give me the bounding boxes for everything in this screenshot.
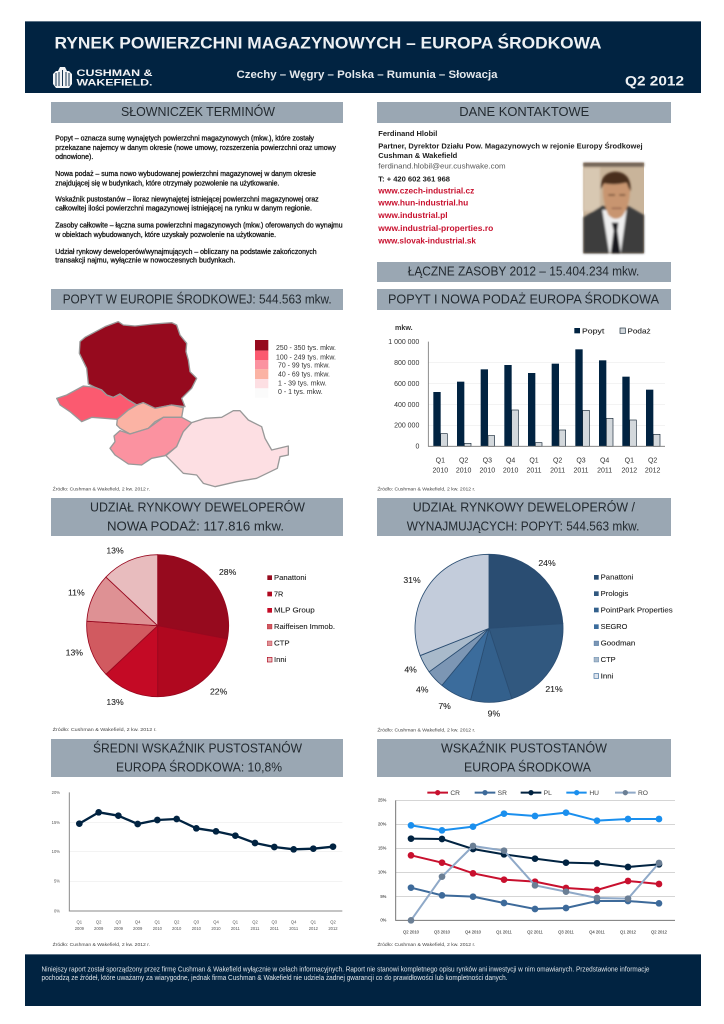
x axis labels: Q1 2012 (620, 929, 637, 934)
x axis labels: 2009 (114, 926, 124, 931)
footer banner with disclaimer: pochodzą ze źródeł, które uważamy za wiarygodne, jednak firma Cushman & Wakefield nie udziela żadnej gwarancji co do prawidłowości lub kompletności danych. (42, 975, 508, 982)
map legend: 70 - 99 tys. mkw. (278, 363, 330, 370)
x axis labels: 2009 (94, 926, 104, 931)
chart legend: CR (450, 790, 460, 797)
heading: glossary (51, 102, 343, 123)
pie labels (66, 545, 237, 707)
text block: glossary definitions: znajdującej się w budynkach, które otrzymały pozwolenie na użytkowanie. (55, 180, 279, 187)
x axis labels: Q2 (330, 919, 336, 924)
x axis labels: Q2 (459, 458, 468, 465)
pie legend: Raiffeisen Immob. (274, 624, 335, 631)
heading: demand in Central Europe (51, 289, 343, 310)
text block: glossary definitions: Zasoby całkowite – łączna suma powierzchni magazynowych (mkw.) oferowanych do wynajmu (55, 223, 343, 230)
text block: contact details: T: + 420 602 361 968 (378, 174, 450, 183)
heading: developers new supply: NOWA PODAŻ: 117.816 mkw. (107, 520, 284, 534)
pie labels: 4% (404, 665, 417, 675)
text block: contact details: www.industrial.pl (377, 211, 448, 220)
pie legend: Goodman (601, 641, 635, 648)
y axis labels (378, 798, 387, 923)
title: RYNEK POWIERZCHNI MAGAZYNOWYCH – EUROPA ŚRODKOWA (54, 34, 602, 52)
bars: Podaż (441, 410, 660, 446)
heading: total stock: ŁĄCZNE ZASOBY 2012 – 15.404.234 mkw. (408, 264, 639, 278)
logo: Cushman & Wakefield: CUSHMAN & (76, 68, 153, 79)
x axis labels: Q4 (135, 919, 141, 924)
series: PL (408, 835, 662, 870)
x axis labels: 2011 (251, 926, 260, 931)
heading: average vacancy rate (51, 739, 343, 777)
x axis labels: Q1 2011 (496, 929, 513, 934)
pie labels: 7% (438, 701, 451, 711)
heading: contact: DANE KONTAKTOWE (459, 105, 589, 119)
chart legend: SR (498, 790, 507, 797)
heading: developers and landlords demand: WYNAJMUJĄCYCH: POPYT: 544.563 mkw. (407, 520, 639, 534)
x axis labels: Q3 2011 (558, 929, 575, 934)
footer banner with disclaimer (25, 954, 701, 1006)
text block: glossary definitions: odnowione). (55, 154, 93, 161)
x axis labels: Q2 2010 (403, 929, 420, 934)
heading: developers new supply: UDZIAŁ RYNKOWY DEWELOPERÓW (90, 500, 305, 514)
x axis labels: 2011 (289, 926, 299, 931)
heading: contact (377, 102, 671, 123)
x axis labels: Q4 2010 (465, 929, 482, 934)
y axis labels: 5% (54, 879, 60, 884)
x axis labels: Q3 (576, 458, 586, 465)
pie legend (267, 575, 335, 664)
source note: Źródło: Cushman & Wakefield, 2 kw. 2012 r. (53, 486, 150, 493)
pie labels: 28% (219, 567, 237, 577)
source note: Źródło: Cushman & Wakefield, 2 kw. 2012 r. (377, 486, 475, 493)
y axis labels: 0 (415, 444, 419, 451)
y axis labels: 1 000 000 (388, 339, 419, 346)
text block: glossary definitions: Popyt – oznacza sumę wynajętych powierzchni magazynowych (mkw.), które zostały (55, 136, 314, 143)
x axis labels: Q1 (155, 919, 161, 924)
pie slices (415, 554, 563, 702)
panel: demand map (53, 322, 336, 493)
chart legend (574, 326, 651, 335)
period label: Q2 2012 (625, 72, 684, 88)
x axis labels: Q1 (625, 458, 634, 465)
text block: contact details: www.czech-industrial.cz (377, 186, 474, 195)
text block: contact details: www.industrial-properties.ro (377, 224, 494, 233)
map: Poland (79, 322, 197, 408)
map legend (255, 340, 336, 398)
chart legend: Podaż (627, 326, 651, 335)
text block: contact details: ferdinand.hlobil@eur.cushwake.com (378, 162, 506, 171)
y axis labels: 5% (380, 894, 387, 899)
map legend: 100 - 249 tys. mkw. (276, 354, 336, 361)
pie legend: CTP (274, 640, 290, 647)
series: CR (408, 852, 662, 893)
y axis labels: 20% (52, 790, 60, 795)
text block: glossary definitions: Wskaźnik pustostanów – iloraz niewynajętej istniejącej powierzchni magazynowej oraz (55, 196, 319, 203)
heading: average vacancy rate: EUROPA ŚRODKOWA: 10,8% (116, 760, 282, 774)
pie legend: Inni (601, 673, 614, 680)
heading: developers and landlords demand (377, 498, 671, 536)
pie legend: 7R (274, 591, 283, 598)
x axis labels: Q3 (194, 919, 200, 924)
pie labels: 11% (68, 587, 85, 597)
x axis labels: Q2 (252, 919, 258, 924)
text block: contact details (377, 129, 643, 245)
x axis labels: 2009 (75, 926, 85, 931)
x axis labels: 2010 (192, 926, 202, 931)
pie labels: 22% (210, 686, 228, 696)
x axis labels: Q4 (600, 458, 609, 465)
text block: contact details: Partner, Dyrektor Działu Pow. Magazynowych w rejonie Europy Środkowej (378, 141, 643, 150)
x axis labels: Q4 (213, 919, 219, 924)
heading: demand and supply (377, 289, 671, 310)
x axis labels: Q3 (483, 458, 492, 465)
x axis labels: 2010 (153, 926, 163, 931)
x axis labels: Q2 (648, 458, 657, 465)
y axis labels: 400 000 (394, 402, 419, 409)
x axis labels: 2009 (133, 926, 143, 931)
text block: contact details: Ferdinand Hlobil (378, 129, 437, 138)
pie legend: Prologis (601, 591, 629, 598)
chart legend: HU (589, 790, 599, 797)
text block: contact details: Cushman & Wakefield (378, 151, 458, 160)
map legend: 1 - 39 tys. mkw. (278, 380, 327, 387)
text block: glossary definitions: przekazane najemcy w danym okresie (nowe umowy, rozszerzenia powierzchni oraz umowy (55, 145, 336, 152)
pie labels: 9% (488, 709, 500, 719)
x axis labels: 2011 (270, 926, 279, 931)
x axis labels: 2012 (328, 926, 338, 931)
logo: Cushman & Wakefield: WAKEFIELD. (76, 78, 152, 88)
y axis labels: 25% (378, 798, 387, 803)
x axis labels: Q1 (311, 919, 317, 924)
x axis labels: 2012 (309, 926, 319, 931)
text block: glossary definitions: całkowitej ilości powierzchni magazynowej istniejącej na rynku w danym regionie. (55, 206, 312, 213)
x axis labels: Q2 2012 (651, 929, 668, 934)
x axis labels: 2011 (526, 468, 542, 475)
x axis labels: Q3 (272, 919, 278, 924)
chart legend: RO (638, 790, 648, 797)
x axis labels: Q2 2011 (527, 929, 544, 934)
y axis labels: 200 000 (394, 423, 419, 430)
heading: glossary: SŁOWNICZEK TERMINÓW (121, 104, 275, 119)
x axis labels (403, 929, 668, 934)
x axis labels: Q1 (529, 458, 539, 465)
source note: Źródło: Cushman & Wakefield, 2 kw. 2012 r. (377, 941, 475, 948)
x axis labels: 2010 (456, 468, 472, 475)
bars: Popyt (433, 349, 653, 446)
pie legend: SEGRO (601, 624, 628, 631)
header banner (25, 21, 701, 93)
x axis labels: 2011 (597, 468, 612, 475)
y axis labels: 0% (380, 918, 387, 923)
x axis labels: 2010 (211, 926, 221, 931)
heading: vacancy rate by country: WSKAŹNIK PUSTOSTANÓW (441, 740, 607, 756)
y axis labels (388, 325, 419, 451)
heading: vacancy rate by country (377, 739, 671, 777)
x axis labels: 2011 (550, 468, 565, 475)
pie labels: 21% (545, 684, 563, 694)
panel: bar chart demand and supply (377, 325, 665, 493)
panel: pie chart new supply (53, 545, 335, 733)
pie labels: 31% (403, 575, 421, 585)
heading: demand and supply: POPYT I NOWA PODAŻ EUROPA ŚRODKOWA (388, 292, 660, 306)
heading: demand in Central Europe: POPYT W EUROPIE ŚRODKOWEJ: 544.563 mkw. (63, 292, 332, 306)
text block: glossary definitions: w obiektach wybudowanych, które uzyskały pozwolenie na użytkowanie. (54, 232, 276, 239)
x axis labels: Q2 (553, 458, 562, 465)
source note: Źródło: Cushman & Wakefield, 2 kw. 2012 r. (53, 726, 157, 733)
map: Hungary (110, 417, 192, 465)
map: Romania (166, 411, 288, 487)
pie legend: Panattoni (601, 575, 634, 582)
chart legend (427, 790, 648, 797)
pie labels: 13% (106, 545, 124, 555)
map: Czech Republic (57, 386, 137, 422)
y axis labels: 10% (52, 849, 60, 854)
text block: glossary definitions: transakcji najmu, wyłącznie w nowoczesnych budynkach. (55, 258, 235, 265)
pie legend (594, 575, 673, 680)
x axis labels: Q4 2011 (589, 929, 606, 934)
pie labels: 13% (106, 697, 124, 707)
map legend: 40 - 69 tys. mkw. (278, 371, 330, 378)
heading: vacancy rate by country: EUROPA ŚRODKOWA (464, 760, 592, 774)
source note: Źródło: Cushman & Wakefield, 2 kw. 2012 r. (377, 726, 475, 733)
logo: Cushman & Wakefield (53, 67, 153, 88)
y axis labels: 20% (378, 822, 387, 827)
panel: line chart vacancy by country (377, 790, 675, 948)
panel: pie chart demand (377, 554, 673, 733)
series: SR (408, 884, 662, 912)
source note: Źródło: Cushman & Wakefield, 2 kw. 2012 r. (53, 941, 150, 948)
x axis labels: 2010 (433, 468, 448, 475)
x axis labels: Q1 (77, 919, 83, 924)
countries subtitle: Czechy – Węgry – Polska – Rumunia – Słowacja (236, 69, 498, 81)
x axis labels: Q4 (291, 919, 297, 924)
x axis labels (75, 919, 338, 931)
x axis labels: Q1 (233, 919, 239, 924)
x axis labels: 2012 (645, 468, 661, 475)
x axis labels: 2012 (622, 468, 637, 475)
chart legend: PL (544, 790, 552, 797)
y axis labels: 0% (54, 908, 60, 913)
pie labels: 13% (66, 647, 83, 657)
series: HU (408, 809, 662, 834)
x axis labels: 2010 (172, 926, 182, 931)
x axis labels: 2011 (231, 926, 240, 931)
map legend: 250 - 350 tys. mkw. (276, 345, 336, 352)
pie legend: PointPark Properties (601, 607, 673, 614)
pie legend: Inni (274, 657, 287, 664)
footer banner with disclaimer: Niniejszy raport został sporządzony przez firmę Cushman & Wakefield wyłącznie w celach informacyjnych. Raport nie stanowi kompletnego opisu rynków ani inwestycji w nim omawianych. Przedstawione informacje (42, 966, 650, 974)
pie slices (87, 555, 229, 697)
panel: line chart average vacancy (52, 790, 342, 948)
heading: average vacancy rate: ŚREDNI WSKAŹNIK PUSTOSTANÓW (93, 740, 302, 756)
y axis labels: 10% (378, 870, 387, 875)
pie legend: MLP Group (274, 608, 315, 615)
chart legend: Popyt (582, 326, 605, 335)
pie legend: Panattoni (274, 575, 307, 582)
text block: glossary definitions: Udział rynkowy deweloperów/wynajmujących – obliczany na podstawie zakończonych (55, 249, 317, 256)
x axis labels: 2010 (503, 468, 519, 475)
text block: contact details: www.slovak-industrial.sk (377, 236, 477, 245)
map: Slovakia (117, 403, 183, 434)
y axis labels (52, 790, 60, 913)
x axis labels: Q3 2010 (434, 929, 451, 934)
map legend: 0 - 1 tys. mkw. (278, 389, 323, 396)
series: RO (408, 843, 662, 924)
x axis labels: 2011 (573, 468, 589, 475)
pie labels: 24% (538, 558, 556, 568)
heading: developers new supply (51, 498, 343, 536)
y axis labels: mkw. (395, 325, 413, 332)
x axis labels: Q2 (174, 919, 180, 924)
heading: total stock (377, 262, 671, 282)
pie labels (403, 558, 563, 719)
pie labels: 4% (416, 684, 429, 694)
x axis labels (433, 458, 661, 475)
pie legend: CTP (601, 657, 616, 664)
y axis labels: 15% (52, 820, 60, 825)
text block: glossary definitions: Nowa podaż – suma nowo wybudowanej powierzchni magazynowej w danym okresie (55, 171, 316, 178)
text block: glossary definitions (54, 136, 343, 265)
y axis labels: 15% (378, 846, 387, 851)
x axis labels: Q4 (506, 458, 515, 465)
vacancy line (76, 809, 336, 853)
y axis labels: 800 000 (394, 360, 419, 367)
heading: developers and landlords demand: UDZIAŁ RYNKOWY DEWELOPERÓW / (413, 500, 636, 514)
text block: contact details: www.hun-industrial.hu (377, 198, 469, 207)
photo: portrait of contact person (583, 163, 644, 253)
x axis labels: 2010 (480, 468, 495, 475)
y axis labels: 600 000 (394, 381, 419, 388)
x axis labels: Q2 (96, 919, 102, 924)
x axis labels: Q3 (116, 919, 122, 924)
x axis labels: Q1 (436, 458, 445, 465)
